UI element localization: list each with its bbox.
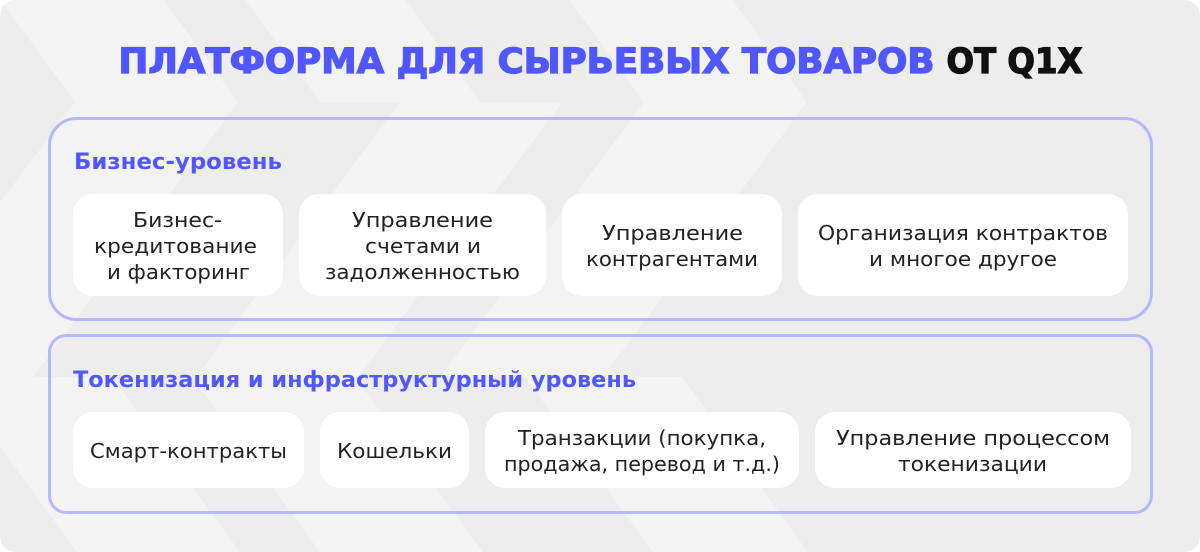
panel: business level — [50, 118, 1152, 320]
card: counterparty management: контрагентами — [586, 247, 758, 271]
heading: tokenization and infrastructure level: Токенизация и инфраструктурный уровень — [73, 367, 636, 393]
card: counterparty management — [562, 194, 782, 296]
card: accounts and debt management: задолженностью — [325, 260, 520, 284]
panel: tokenization and infrastructure level — [50, 336, 1152, 512]
card: wallets — [320, 412, 469, 488]
card: accounts and debt management: Управление — [352, 208, 493, 232]
card: business lending and factoring — [73, 194, 283, 296]
card: contract organization: Организация контрактов — [818, 221, 1108, 245]
card: business lending and factoring: и факторинг — [107, 260, 250, 284]
heading: business level: Бизнес-уровень — [74, 149, 282, 175]
card: transactions: продажа, перевод и т.д.) — [504, 452, 780, 476]
card: smart contracts — [73, 412, 304, 488]
card: contract organization: и многое другое — [869, 247, 1057, 271]
card: tokenization process management: токенизации — [898, 452, 1047, 476]
title: ОТ Q1X — [946, 42, 1082, 82]
card: accounts and debt management — [299, 194, 546, 296]
card: business lending and factoring: Бизнес- — [133, 208, 222, 232]
card: tokenization process management: Управление процессом — [836, 426, 1110, 450]
card: business lending and factoring: кредитование — [94, 234, 257, 258]
card: wallets: Кошельки — [337, 439, 452, 463]
card: smart contracts: Смарт-контракты — [90, 439, 287, 463]
card: counterparty management: Управление — [602, 221, 743, 245]
card: contract organization — [798, 194, 1128, 296]
card: tokenization process management — [815, 412, 1131, 488]
title: ПЛАТФОРМА ДЛЯ СЫРЬЕВЫХ ТОВАРОВ — [118, 42, 934, 82]
card: accounts and debt management: счетами и — [365, 234, 481, 258]
card: transactions: Транзакции (покупка, — [517, 426, 766, 450]
card: transactions — [485, 412, 799, 488]
